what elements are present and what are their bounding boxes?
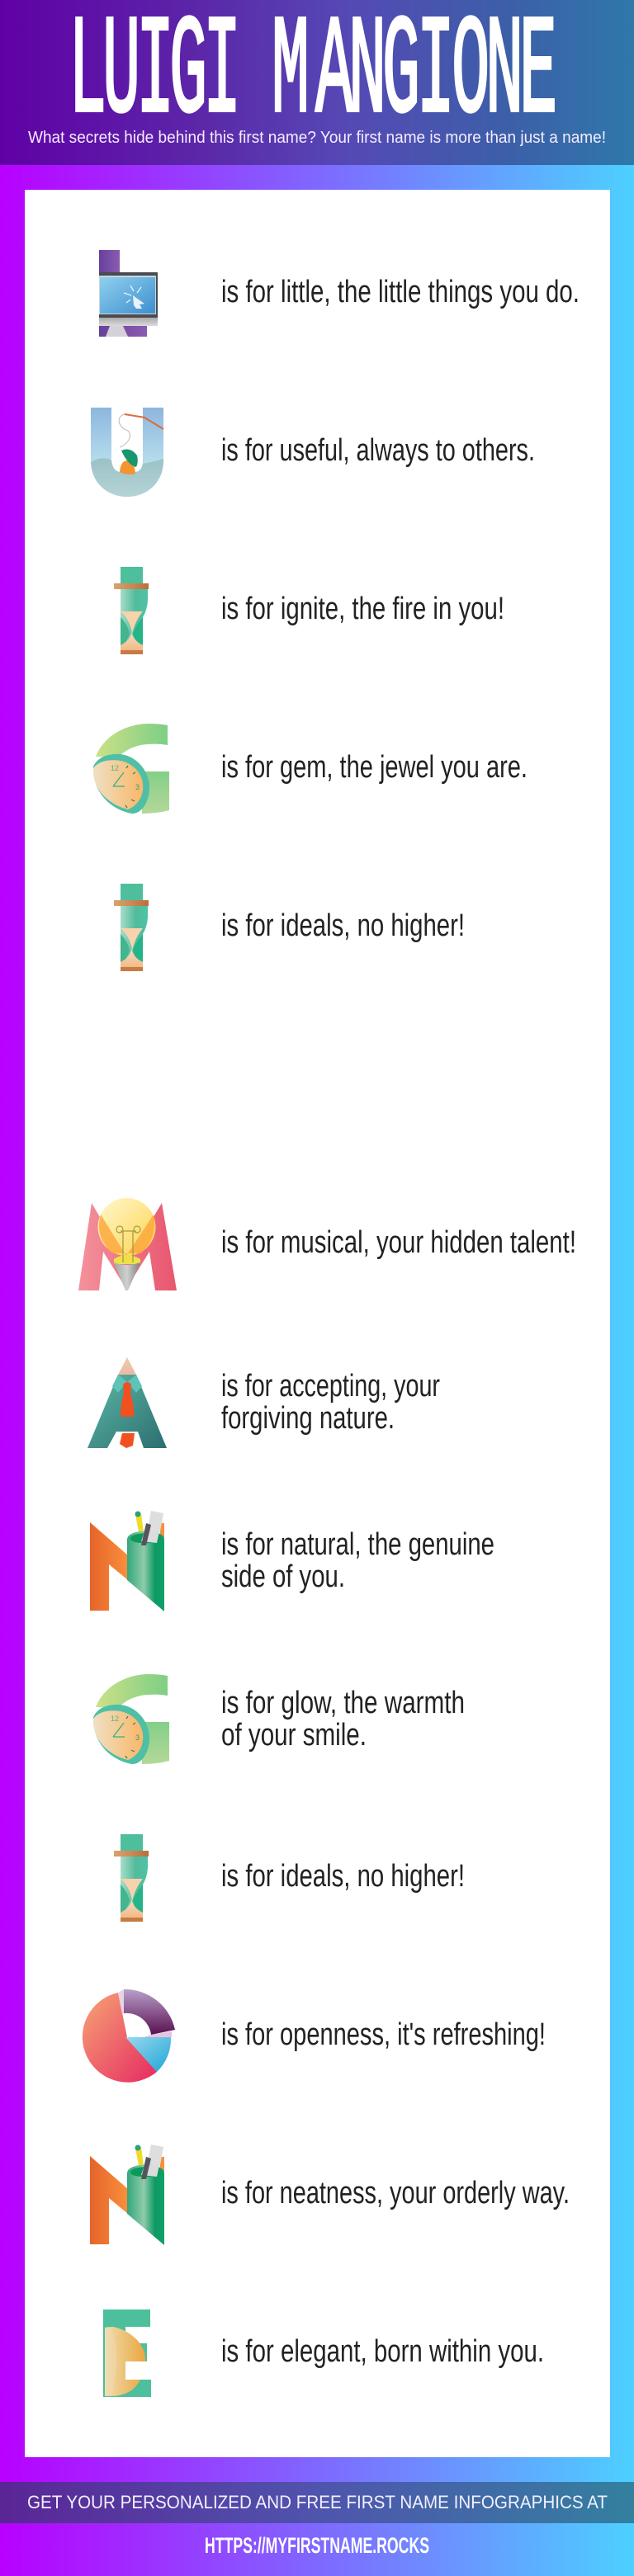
row U: icon fishing	[91, 408, 163, 497]
row I: icon hourglass	[114, 567, 149, 654]
row O: text: is for openness, it's refreshing!	[221, 2017, 546, 2052]
row U: text: is for useful, always to others.	[221, 433, 535, 468]
row E: text: is for elegant, born within you.	[221, 2334, 544, 2369]
row L: icon computer	[99, 250, 158, 337]
row E: icon moon	[103, 2309, 151, 2397]
subtitle: What secrets hide behind this first name? Your first name is more than just a name!	[28, 129, 606, 147]
header band	[0, 0, 634, 165]
row N: text line 2: side of you.	[221, 1559, 345, 1594]
row A: text line 2: forgiving nature.	[221, 1401, 395, 1436]
row G: text: is for glow, the warmth	[221, 1686, 465, 1720]
row M: icon light bulb	[78, 1198, 177, 1290]
row A: text: is for accepting, your	[221, 1369, 440, 1404]
row O: icon pie chart	[83, 1989, 175, 2083]
row N: text: is for natural, the genuine	[221, 1527, 494, 1562]
row G: text line 2: of your smile.	[221, 1718, 367, 1753]
row I: icon hourglass	[114, 884, 149, 971]
row N: icon pencil cup	[90, 2144, 164, 2245]
row I: text: is for ideals, no higher!	[221, 1859, 465, 1894]
row N: icon pencil cup	[90, 1511, 164, 1611]
footer url: HTTPS://MYFIRSTNAME.ROCKS	[205, 2533, 429, 2558]
row G: icon clock	[93, 1674, 169, 1764]
row G: text: is for gem, the jewel you are.	[221, 750, 528, 785]
footer text: GET YOUR PERSONALIZED AND FREE FIRST NAME INFOGRAPHICS AT	[27, 2492, 608, 2512]
row I: text: is for ignite, the fire in you!	[221, 592, 504, 626]
row A: icon tie	[88, 1357, 167, 1448]
row I: icon hourglass	[114, 1834, 149, 1922]
footer band	[0, 2482, 634, 2523]
row I: text: is for ideals, no higher!	[221, 908, 465, 943]
row G: icon clock	[93, 724, 169, 814]
